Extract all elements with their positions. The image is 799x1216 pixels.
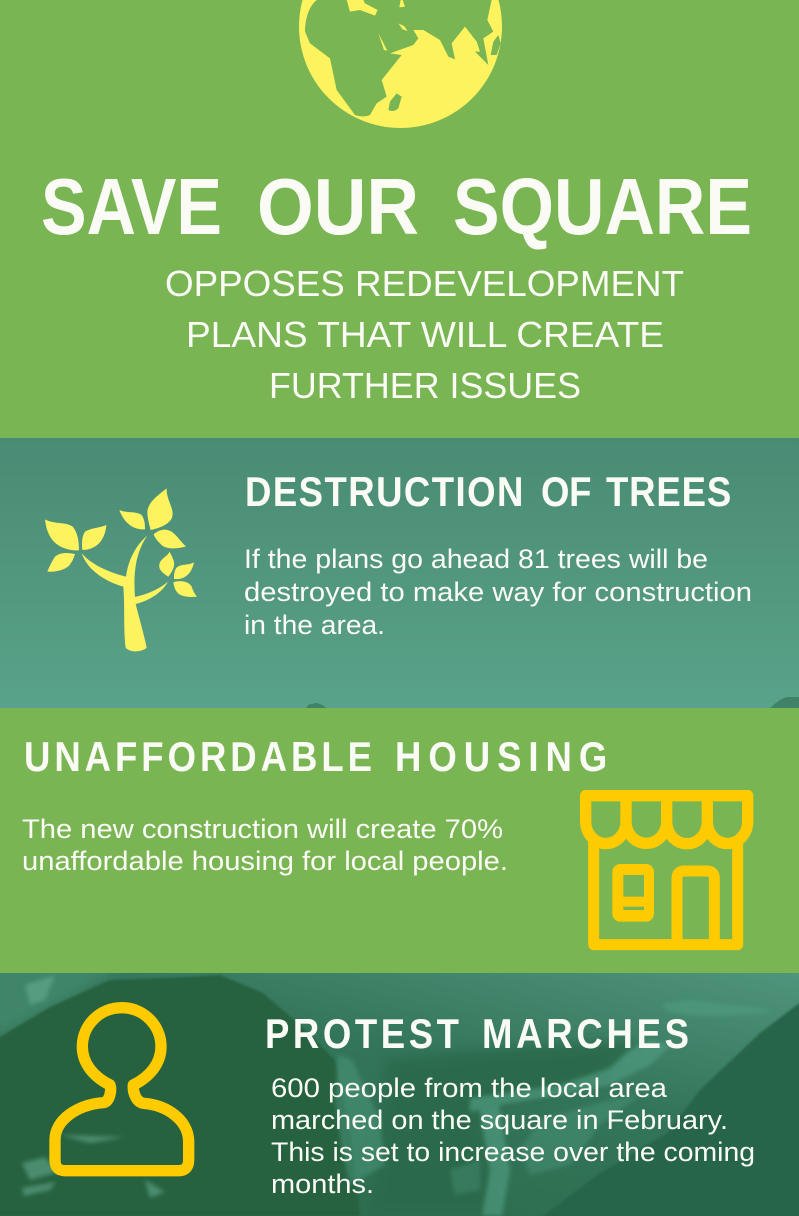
icon: person [55,1008,189,1171]
title: SAVE [41,162,222,251]
heading: DESTRUCTION [245,469,523,516]
heading [265,1011,689,1058]
heading [245,469,731,516]
panel: header [0,0,799,438]
icon: storefront [586,796,748,945]
subtitle: PLANS THAT WILL CREATE [186,314,664,355]
heading: MARCHES [482,1011,689,1058]
heading: HOUSING [395,734,607,781]
body text: 600 people from the local area [271,1073,668,1103]
heading: UNAFFORDABLE [24,734,372,781]
body text: This is set to increase over the coming [271,1137,755,1167]
subtitle: FURTHER ISSUES [269,365,581,406]
panel: unaffordable housing [0,708,799,973]
icon: globe [299,0,502,128]
heading [24,734,607,781]
title [41,162,752,251]
body text: If the plans go ahead 81 trees will be [244,544,708,574]
body text: The new construction will create 70% [22,814,503,844]
subtitle [165,263,684,406]
background: mountain photo [0,960,799,1216]
body text: months. [271,1169,374,1199]
body text: marched on the square in February. [271,1105,728,1135]
icon: tree [45,488,197,651]
panel: protest marches [0,960,799,1216]
body text: in the area. [244,610,385,640]
heading: PROTEST [265,1011,459,1058]
heading: OF [541,469,591,516]
subtitle: OPPOSES REDEVELOPMENT [165,263,684,304]
heading: TREES [606,469,731,516]
body text [22,814,508,876]
panel: destruction of trees [0,438,799,708]
body text: unaffordable housing for local people. [22,846,508,876]
body text [271,1073,755,1199]
title: SQUARE [453,162,752,251]
body text: destroyed to make way for construction [244,577,752,607]
title: OUR [257,162,419,251]
body text [244,544,752,640]
